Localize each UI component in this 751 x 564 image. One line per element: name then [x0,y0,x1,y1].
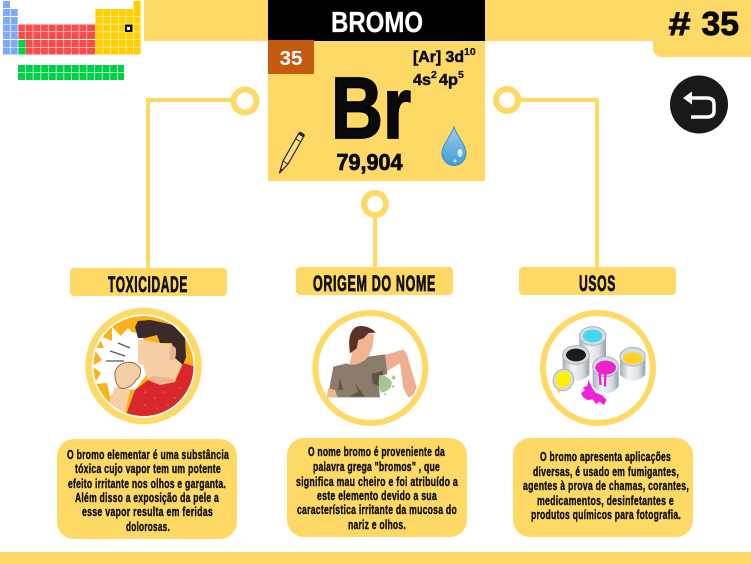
heading: usos: USOS [579,271,616,296]
connector: usos [496,89,597,268]
text block: toxicidade: efeito irritante nos olhos e garganta. [68,477,226,491]
text block: origem do nome: característica irritante da mucosa do [297,503,457,517]
text block: origem do nome: este elemento devido a sua [317,489,437,503]
heading: usos [519,267,676,296]
atomic number: 35 [280,47,302,70]
electron configuration: 4s [413,72,431,89]
illustration: man coughing [88,311,200,421]
heading: origem do nome: ORIGEM DO NOME [313,271,436,296]
text block: toxicidade: Além disso a exposição da pele a [75,491,219,505]
text block: usos: O bromo apresenta aplicações [540,450,671,464]
panel: toxicidade [57,268,237,539]
element number tab: # [668,6,690,42]
element symbol: Br [331,60,411,157]
bottom band [0,552,751,564]
text block: origem do nome [287,438,467,537]
icon: water drop liquid [442,127,466,166]
card title: BROMO [331,7,423,39]
electron configuration: 4p [439,72,458,89]
text block: usos [513,438,693,537]
text block: usos: produtos químicos para fotografia. [531,508,681,522]
text block: toxicidade: dolorosas. [126,520,170,534]
card title [268,0,485,41]
text block: toxicidade: esse vapor resulta em feridas [82,505,213,519]
element number tab: 35 [702,5,739,42]
heading: toxicidade [70,268,227,297]
electron configuration: 2 [431,69,437,81]
text block: toxicidade [57,439,237,539]
top band left [144,0,269,41]
electron configuration: [Ar] 3d [413,49,464,66]
panel: usos [513,267,693,537]
top band right [484,0,654,41]
text block: toxicidade: tóxica cujo vapor tem um potente [75,462,221,476]
atomic number [268,40,314,74]
text block: toxicidade: O bromo elementar é uma substância [67,448,229,462]
back button [670,76,728,134]
electron configuration [413,46,476,89]
heading: toxicidade: TOXICIDADE [108,272,188,297]
text block: origem do nome: nariz e olhos. [348,518,406,532]
icon: pencil solid [280,132,305,173]
heading: origem do nome [296,267,453,296]
text block: usos: medicamentos, desinfetantes e [537,494,674,508]
atomic mass: 79,904 [336,149,403,175]
illustration: sweaty man [315,313,425,423]
element number tab [653,0,751,57]
connector: origem do nome [364,193,386,268]
text block: origem do nome: O nome bromo é proveniente da [308,445,445,459]
text block: usos: diversas, é usado em fumigantes, [533,465,679,479]
text block: origem do nome: significa mau cheiro e foi atribuído a [296,475,458,489]
connector: toxicidade [148,90,256,268]
text block: origem do nome: palavra grega "bromos" , que [313,460,440,474]
electron configuration: 10 [464,46,476,58]
illustration: paint cans [543,313,653,423]
electron configuration: 5 [458,69,464,81]
periodic table locator [3,1,141,80]
element card [268,0,485,181]
panel: origem do nome [287,267,467,537]
